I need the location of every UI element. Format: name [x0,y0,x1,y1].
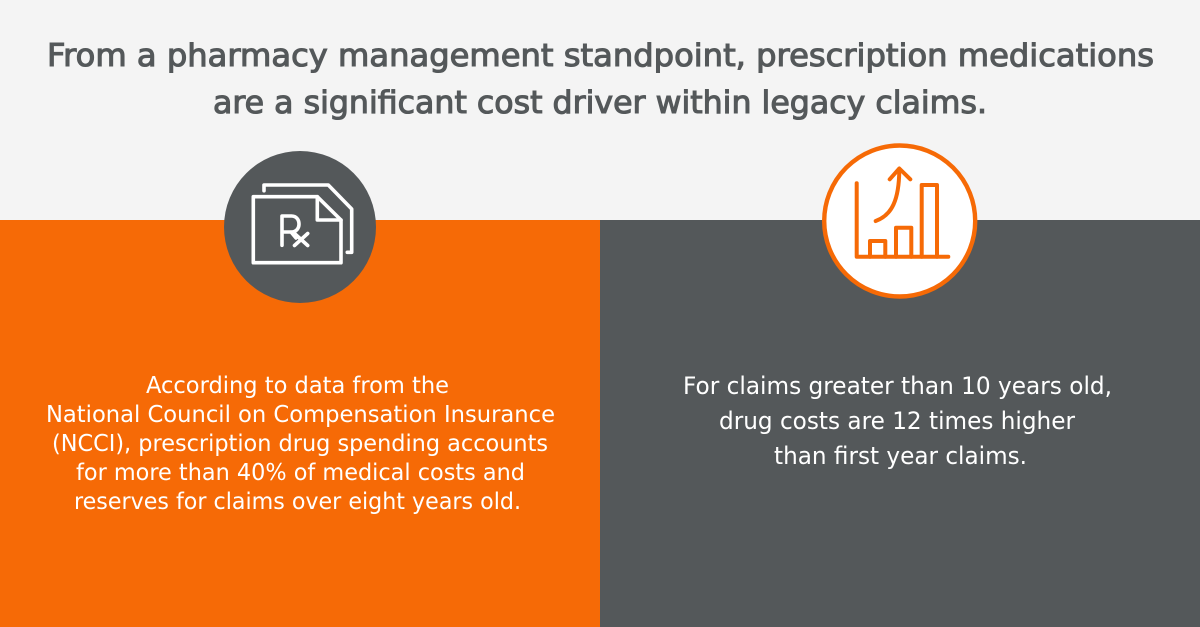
text block: drug cost statistic: than first year claims. [774,442,1027,470]
panel: left orange [0,220,600,627]
text block: NCCI statistic: reserves for claims over eight years old. [74,489,521,515]
icon: prescription document [224,151,376,303]
text block: drug cost statistic: drug costs are 12 times higher [719,407,1075,435]
text block: NCCI statistic: According to data from the [146,373,449,399]
text block: NCCI statistic: for more than 40% of medical costs and [76,460,525,486]
text block: NCCI statistic [46,373,555,515]
title [47,38,1154,121]
text block: drug cost statistic [683,372,1112,470]
text block: NCCI statistic: National Council on Compensation Insurance [46,402,555,428]
icon: rising bar chart [824,146,975,296]
text block: drug cost statistic: For claims greater than 10 years old, [683,372,1112,400]
title: From a pharmacy management standpoint, prescription medications [47,38,1154,74]
text block: NCCI statistic: (NCCI), prescription drug spending accounts [52,431,548,457]
title: are a significant cost driver within legacy claims. [213,85,987,121]
panel: right gray [600,220,1200,627]
